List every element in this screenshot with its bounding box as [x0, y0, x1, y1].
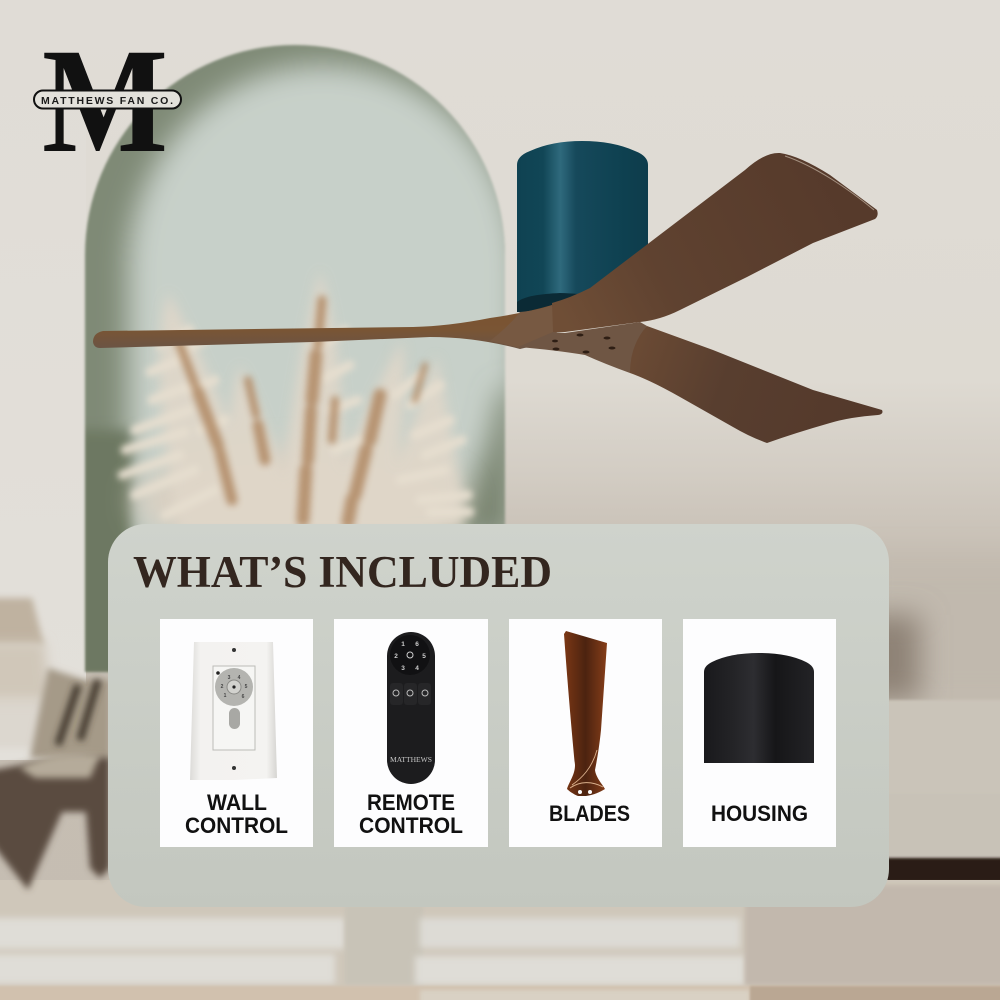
- icon: wall plate: 4: [238, 675, 241, 681]
- blade tip highlight: [785, 156, 874, 210]
- icon: wooden blade: [564, 631, 607, 796]
- icon: wall plate: 3: [228, 675, 231, 681]
- floor: [0, 880, 1000, 1000]
- label: REMOTE: [367, 790, 455, 815]
- card: wall control: [160, 619, 313, 847]
- icon: wall plate: [190, 642, 277, 780]
- icon: wall plate: 1: [224, 693, 227, 699]
- card: remote control: CONTROL: [359, 813, 463, 838]
- niche light centre: [111, 48, 506, 530]
- niche lower left shadow: [75, 430, 130, 680]
- blade: upper right: [552, 153, 878, 332]
- icon: wall plate: 6: [242, 694, 245, 700]
- icon: remote: [387, 632, 435, 784]
- icon: remote: 3: [401, 665, 405, 672]
- label: HOUSING: [711, 801, 808, 826]
- card: blades: [509, 619, 662, 847]
- motor underside shadow: [517, 293, 600, 315]
- ceiling fan: [93, 141, 882, 443]
- pampas grass: [122, 270, 470, 550]
- icon: remote: 1: [401, 641, 405, 648]
- card: wall control: CONTROL: [185, 813, 288, 838]
- icon: remote: 4: [415, 665, 419, 672]
- blade: long left: [93, 305, 558, 349]
- icon: remote: MATTHEWS: [390, 755, 432, 764]
- logo: Matthews Fan Co.: MATTHEWS FAN CO.: [41, 95, 173, 107]
- heading: WHAT’S INCLUDED: [133, 547, 552, 597]
- label: BLADES: [549, 801, 630, 826]
- panel: what's included: [108, 524, 889, 907]
- label: WALL: [207, 790, 267, 815]
- card: housing: [683, 619, 836, 847]
- left armchair and blanket: [0, 598, 110, 890]
- blade: lower right: [625, 326, 882, 443]
- icon: remote: 5: [422, 653, 426, 660]
- blade hub with screw holes: [518, 322, 647, 373]
- light left wall: [0, 0, 86, 760]
- niche lower right shadow: [452, 380, 506, 524]
- sofa right side: [860, 560, 1000, 882]
- icon: wall plate: 2: [221, 684, 224, 690]
- icon: remote: 2: [394, 653, 398, 660]
- icon: wall plate: 5: [245, 684, 248, 690]
- fan motor housing: [517, 141, 648, 312]
- blade root section: [490, 305, 557, 348]
- logo: Matthews Fan Co.: M: [42, 17, 168, 184]
- arched green niche: [83, 44, 506, 674]
- card: remote control: [334, 619, 488, 847]
- icon: black housing: [704, 653, 814, 763]
- icon: remote: 6: [415, 641, 419, 648]
